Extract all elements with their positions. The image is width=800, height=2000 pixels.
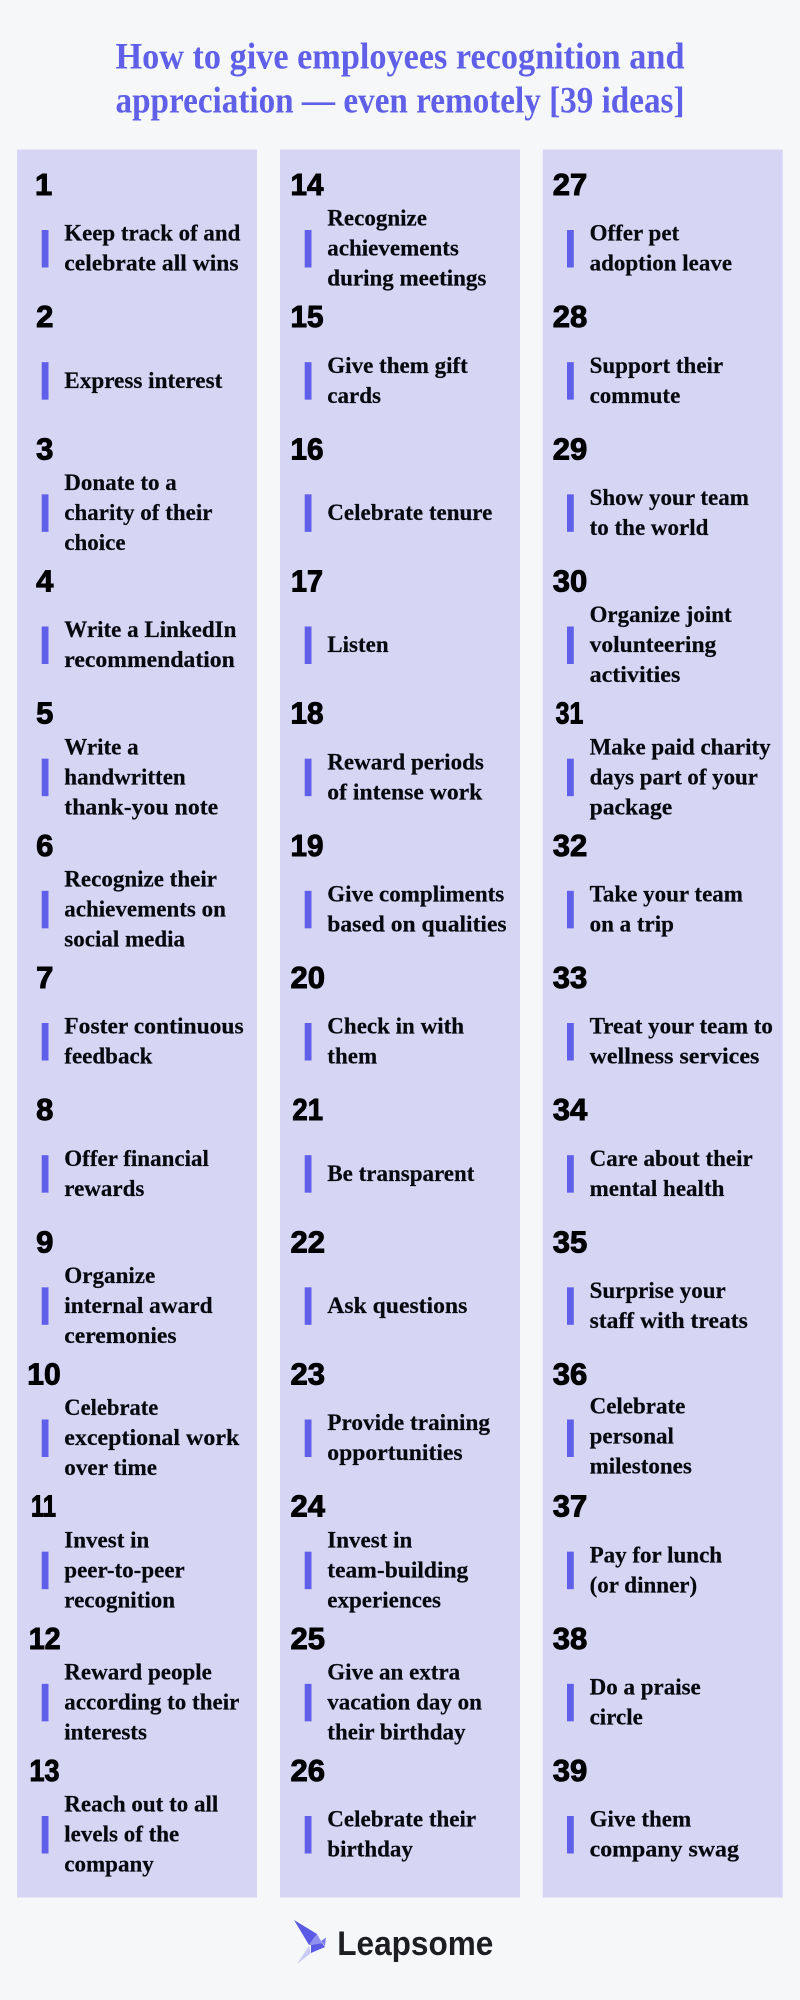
idea 15: Give them gift [327, 353, 468, 378]
idea 39: Give them [590, 1807, 691, 1832]
idea 11: recognition [64, 1587, 175, 1612]
idea 18: Reward periods [327, 749, 484, 774]
idea 23: 23 [290, 1356, 325, 1392]
idea 27: 27 [553, 167, 587, 202]
idea 22: Ask questions [327, 1293, 467, 1318]
panel background 3 [543, 150, 783, 1898]
idea 17: Listen [327, 632, 389, 657]
idea 23 [290, 1356, 490, 1465]
idea 10: over time [64, 1455, 157, 1480]
idea 8: 8 [36, 1092, 53, 1127]
idea 26: Celebrate their [327, 1807, 476, 1832]
idea 8: rewards [64, 1176, 144, 1201]
idea 13: 13 [30, 1753, 60, 1788]
idea 4 [36, 564, 237, 672]
idea 32 [553, 828, 743, 936]
idea 20: 20 [290, 960, 325, 995]
idea 32: Take your team [590, 881, 743, 906]
idea 22: 22 [290, 1224, 325, 1259]
idea 1: Keep track of and [64, 221, 240, 246]
idea 25: Give an extra [327, 1659, 461, 1684]
idea 11 [31, 1489, 185, 1612]
idea 4: Write a LinkedIn [64, 617, 237, 642]
idea 32: 32 [553, 828, 587, 863]
idea 29 [553, 431, 749, 540]
idea 21 [292, 1092, 475, 1193]
panel background 1 [17, 150, 257, 1898]
idea 24: Invest in [327, 1527, 413, 1552]
idea 31: Make paid charity [590, 734, 771, 759]
idea 15: cards [327, 383, 381, 408]
idea 13: levels of the [64, 1822, 179, 1847]
icon: origami bird [294, 1920, 326, 1964]
panel: column 3 [543, 150, 783, 1898]
idea 10 [27, 1356, 240, 1480]
idea 5: Write a [64, 734, 139, 759]
idea 25: their birthday [327, 1719, 466, 1744]
idea 19: based on qualities [327, 911, 507, 936]
idea 38: 38 [553, 1621, 587, 1656]
idea 34: 34 [553, 1092, 588, 1127]
idea 11: Invest in [64, 1527, 150, 1552]
idea 37: (or dinner) [590, 1572, 697, 1597]
idea 17 [291, 564, 389, 664]
idea 7 [36, 960, 244, 1069]
idea 18 [290, 696, 484, 804]
idea 29: to the world [590, 515, 709, 540]
idea 2: Express interest [64, 368, 223, 393]
idea 33: 33 [553, 960, 587, 995]
idea 6 [36, 828, 226, 951]
idea 30: volunteering [590, 632, 717, 657]
idea 35 [553, 1224, 748, 1333]
idea 6: Recognize their [64, 866, 217, 891]
idea 31: package [590, 794, 672, 819]
idea 39: company swag [590, 1837, 739, 1862]
idea 9: Organize [64, 1263, 155, 1288]
idea 26: birthday [327, 1837, 413, 1862]
title: How to give employees recognition and [116, 36, 685, 77]
idea 28: Support their [590, 353, 723, 378]
idea 8 [36, 1092, 209, 1201]
panel: column 2 [280, 150, 520, 1898]
idea 33: Treat your team to [590, 1014, 773, 1039]
idea 38: circle [590, 1704, 643, 1729]
title [116, 36, 685, 121]
logo: Leapsome [294, 1920, 493, 1964]
idea 21: 21 [292, 1092, 323, 1127]
idea 10: exceptional work [64, 1425, 240, 1450]
idea 23: Provide training [327, 1410, 490, 1435]
idea 25 [290, 1621, 482, 1744]
idea 38: Do a praise [590, 1674, 701, 1699]
idea 6: achievements on [64, 896, 226, 921]
idea 9: 9 [36, 1224, 53, 1259]
idea 29: 29 [553, 431, 587, 466]
idea 9 [36, 1224, 213, 1348]
idea 16: Celebrate tenure [327, 500, 492, 525]
idea 26: 26 [290, 1753, 325, 1788]
idea 36: personal [590, 1424, 674, 1448]
idea 30 [553, 564, 732, 687]
idea 6: 6 [36, 828, 53, 863]
idea 9: ceremonies [64, 1323, 177, 1348]
idea 31: 31 [556, 696, 583, 731]
idea 13: Reach out to all [64, 1792, 218, 1817]
idea 20: them [327, 1044, 377, 1069]
idea 29: Show your team [590, 485, 749, 510]
idea 25: 25 [290, 1621, 325, 1656]
idea 18: of intense work [327, 779, 483, 804]
idea 24: 24 [290, 1489, 326, 1524]
idea 16 [290, 431, 492, 532]
idea 12: 12 [29, 1621, 61, 1656]
idea 20 [290, 960, 464, 1069]
idea 31: days part of your [590, 764, 758, 789]
idea 12: according to their [64, 1689, 239, 1714]
idea 37: 37 [553, 1489, 587, 1524]
idea 12: Reward people [64, 1659, 212, 1684]
idea 14 [290, 167, 486, 291]
idea 20: Check in with [327, 1014, 464, 1039]
idea 6: social media [64, 926, 186, 951]
idea 14: during meetings [327, 266, 486, 291]
idea 2 [36, 299, 223, 400]
idea 28: 28 [553, 299, 587, 334]
idea 3: charity of their [64, 500, 212, 525]
idea 4: recommendation [64, 647, 235, 672]
idea 26 [290, 1753, 476, 1862]
idea 14: achievements [327, 236, 459, 261]
idea 21: Be transparent [327, 1161, 475, 1186]
idea 37 [553, 1489, 722, 1597]
idea 2: 2 [36, 299, 53, 334]
idea 38 [553, 1621, 701, 1729]
idea 5: handwritten [64, 764, 186, 789]
idea 3 [36, 431, 212, 555]
idea 4: 4 [36, 564, 54, 598]
idea 37: Pay for lunch [590, 1542, 722, 1567]
idea 8: Offer financial [64, 1146, 209, 1171]
idea 19: 19 [290, 828, 324, 863]
idea 3: Donate to a [64, 470, 177, 495]
idea 19 [290, 828, 507, 936]
panel background 2 [280, 150, 520, 1898]
idea 30: Organize joint [590, 602, 732, 627]
idea 14: 14 [290, 167, 324, 202]
idea 3: choice [64, 530, 126, 555]
idea 1: 1 [35, 167, 52, 202]
idea 5 [36, 696, 218, 819]
idea 28: commute [590, 383, 680, 408]
idea 10: Celebrate [64, 1395, 158, 1420]
idea 16: 16 [290, 431, 324, 466]
idea 9: internal award [64, 1293, 213, 1318]
idea 39 [553, 1753, 739, 1862]
idea 1 [35, 167, 240, 276]
idea 22 [290, 1224, 467, 1325]
idea 24: team-building [327, 1557, 469, 1582]
idea 15 [290, 299, 468, 408]
idea 31 [556, 696, 771, 819]
idea 27: adoption leave [590, 251, 732, 276]
idea 33 [553, 960, 773, 1069]
idea 24 [290, 1489, 469, 1612]
idea 27: Offer pet [590, 221, 680, 246]
idea 5: thank-you note [64, 794, 218, 819]
idea 34 [553, 1092, 753, 1201]
idea 13 [30, 1753, 218, 1877]
idea 28 [553, 299, 723, 408]
panel: column 1 [17, 150, 257, 1898]
idea 11: peer-to-peer [64, 1557, 185, 1582]
idea 34: mental health [590, 1176, 725, 1201]
idea 27 [553, 167, 732, 276]
idea 17: 17 [291, 564, 323, 598]
idea 30: activities [590, 662, 680, 687]
idea 18: 18 [290, 696, 324, 731]
idea 5: 5 [36, 696, 53, 731]
idea 36: Celebrate [590, 1394, 685, 1418]
idea 13: company [64, 1852, 154, 1877]
idea 12: interests [64, 1719, 147, 1744]
idea 25: vacation day on [327, 1689, 482, 1714]
idea 35: Surprise your [590, 1278, 726, 1303]
idea 35: 35 [553, 1224, 587, 1259]
idea 10: 10 [27, 1356, 61, 1392]
title: appreciation — even remotely [39 ideas] [116, 80, 684, 121]
idea 7: 7 [36, 960, 53, 995]
idea 34: Care about their [590, 1146, 753, 1171]
idea 19: Give compliments [327, 881, 504, 906]
idea 3: 3 [36, 431, 53, 466]
idea 7: Foster continuous [64, 1014, 244, 1039]
idea 36: milestones [590, 1454, 692, 1478]
idea 24: experiences [327, 1587, 441, 1612]
idea 36: 36 [553, 1356, 587, 1392]
idea 30: 30 [553, 564, 587, 598]
idea 33: wellness services [590, 1044, 759, 1069]
wordmark: Leapsome [337, 1925, 493, 1963]
idea 23: opportunities [327, 1440, 463, 1465]
idea 11: 11 [31, 1489, 56, 1524]
idea 39: 39 [553, 1753, 587, 1788]
idea 32: on a trip [590, 911, 674, 936]
idea 35: staff with treats [590, 1308, 748, 1333]
idea 15: 15 [290, 299, 324, 334]
idea 1: celebrate all wins [64, 251, 239, 276]
idea 7: feedback [64, 1044, 153, 1069]
idea 36 [553, 1356, 692, 1478]
idea 14: Recognize [327, 206, 427, 231]
idea 12 [29, 1621, 239, 1744]
